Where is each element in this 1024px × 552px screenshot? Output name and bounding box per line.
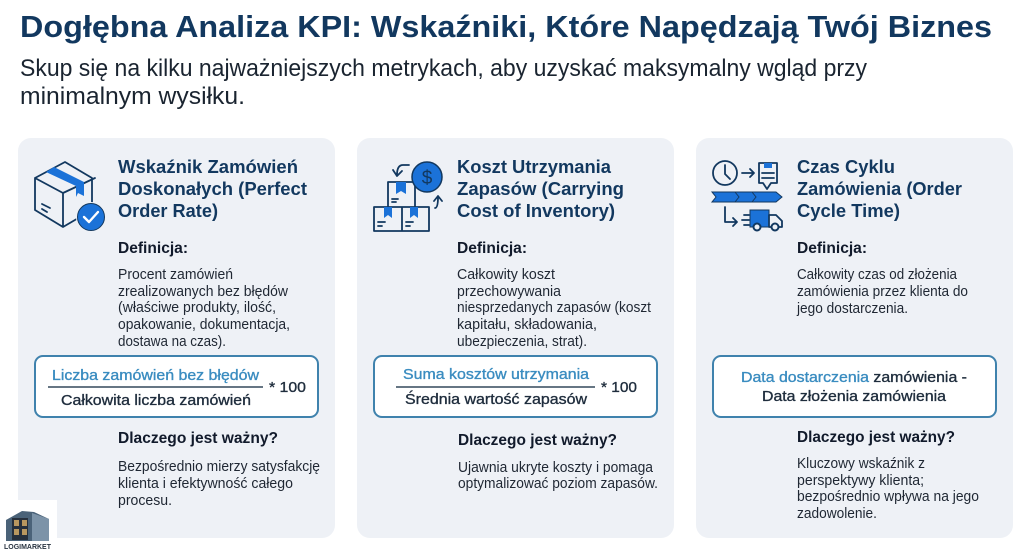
formula box: * 100: [269, 379, 306, 396]
logo: Logimarket: [0, 500, 57, 552]
formula box: * 100: [601, 379, 637, 396]
panel heading: Cost of Inventory): [457, 200, 615, 221]
title: Dogłębna Analiza KPI: Wskaźniki, Które Napędzają Twój Biznes: [20, 9, 992, 44]
definition text: jego dostarczenia.: [796, 301, 908, 317]
why text: [458, 460, 658, 492]
definition text: [457, 267, 651, 350]
panel heading: Doskonałych (Perfect: [118, 178, 307, 199]
why heading: Dlaczego jest ważny?: [458, 432, 617, 449]
panel heading: Order Rate): [118, 200, 218, 221]
icon: box with check badge: [35, 162, 106, 232]
definition text: zamówienia przez klienta do: [797, 284, 968, 300]
panel heading: Cycle Time): [797, 200, 900, 221]
panel heading: Zamówienia (Order: [797, 178, 962, 199]
definition text: kapitału, składowania,: [457, 317, 597, 333]
why text: [797, 456, 979, 522]
definition text: opakowanie, dokumentacja,: [118, 317, 290, 333]
why text: Ujawnia ukryte koszty i pomaga: [458, 460, 654, 476]
why text: zadowolenie.: [797, 506, 877, 522]
formula box: Suma kosztów utrzymania: [403, 366, 590, 383]
formula box: Data dostarczenia zamówienia -: [741, 369, 967, 386]
formula box: [713, 356, 996, 417]
definition text: niesprzedanych zapasów (koszt: [457, 300, 651, 316]
panel: Carrying Cost of Inventory: [357, 138, 674, 538]
why text: Kluczowy wskaźnik z: [797, 456, 925, 472]
definition text: (właściwe produkty, ilość,: [118, 300, 276, 316]
definition text: Całkowity koszt: [457, 267, 555, 283]
why heading: Dlaczego jest ważny?: [118, 430, 278, 447]
subtitle: minimalnym wysiłku.: [20, 83, 245, 110]
panel heading: Koszt Utrzymania: [457, 156, 612, 177]
panel heading: Czas Cyklu: [797, 156, 895, 177]
panel heading: [118, 156, 307, 221]
why text: perspektywy klienta;: [797, 473, 924, 489]
why text: bezpośrednio wpływa na jego: [797, 489, 979, 505]
definition text: przechowywania: [457, 284, 562, 300]
why text: klienta i efektywność całego: [118, 476, 293, 492]
icon: clock, document, truck: [712, 161, 782, 230]
icon: boxes with coin: $: [422, 168, 433, 189]
panel heading: Zapasów (Carrying: [457, 178, 624, 199]
logo: Logimarket: LOGIMARKET: [4, 542, 51, 551]
definition text: ubezpieczenia, strat).: [457, 334, 587, 350]
formula box: [374, 356, 657, 417]
formula box: Data złożenia zamówienia: [762, 388, 947, 405]
why heading: Dlaczego jest ważny?: [797, 429, 955, 446]
why text: [118, 459, 320, 509]
panel heading: [797, 156, 962, 221]
why text: optymalizować poziom zapasów.: [458, 476, 658, 492]
why text: Bezpośrednio mierzy satysfakcję: [118, 459, 320, 475]
panel heading: Wskaźnik Zamówień: [118, 156, 298, 177]
formula box: Całkowita liczba zamówień: [61, 392, 251, 409]
icon: boxes with coin: [374, 162, 442, 231]
definition text: zrealizowanych bez błędów: [118, 284, 289, 300]
definition text: [796, 267, 968, 317]
panel heading: [457, 156, 624, 221]
formula box: Liczba zamówień bez błędów: [52, 367, 259, 384]
definition text: dostawa na czas).: [118, 334, 226, 350]
formula box: [35, 356, 318, 417]
definition heading: Definicja:: [797, 240, 867, 257]
definition text: [118, 267, 290, 350]
definition text: Całkowity czas od złożenia: [797, 267, 958, 283]
panel: Perfect Order Rate: [18, 138, 335, 538]
panel: Order Cycle Time: [696, 138, 1013, 538]
definition text: Procent zamówień: [118, 267, 233, 283]
definition heading: Definicja:: [118, 240, 188, 257]
definition heading: Definicja:: [457, 240, 527, 257]
subtitle: [20, 55, 867, 110]
why text: procesu.: [118, 493, 172, 509]
subtitle: Skup się na kilku najważniejszych metrykach, aby uzyskać maksymalny wgląd przy: [20, 55, 867, 82]
formula box: Średnia wartość zapasów: [405, 390, 587, 408]
